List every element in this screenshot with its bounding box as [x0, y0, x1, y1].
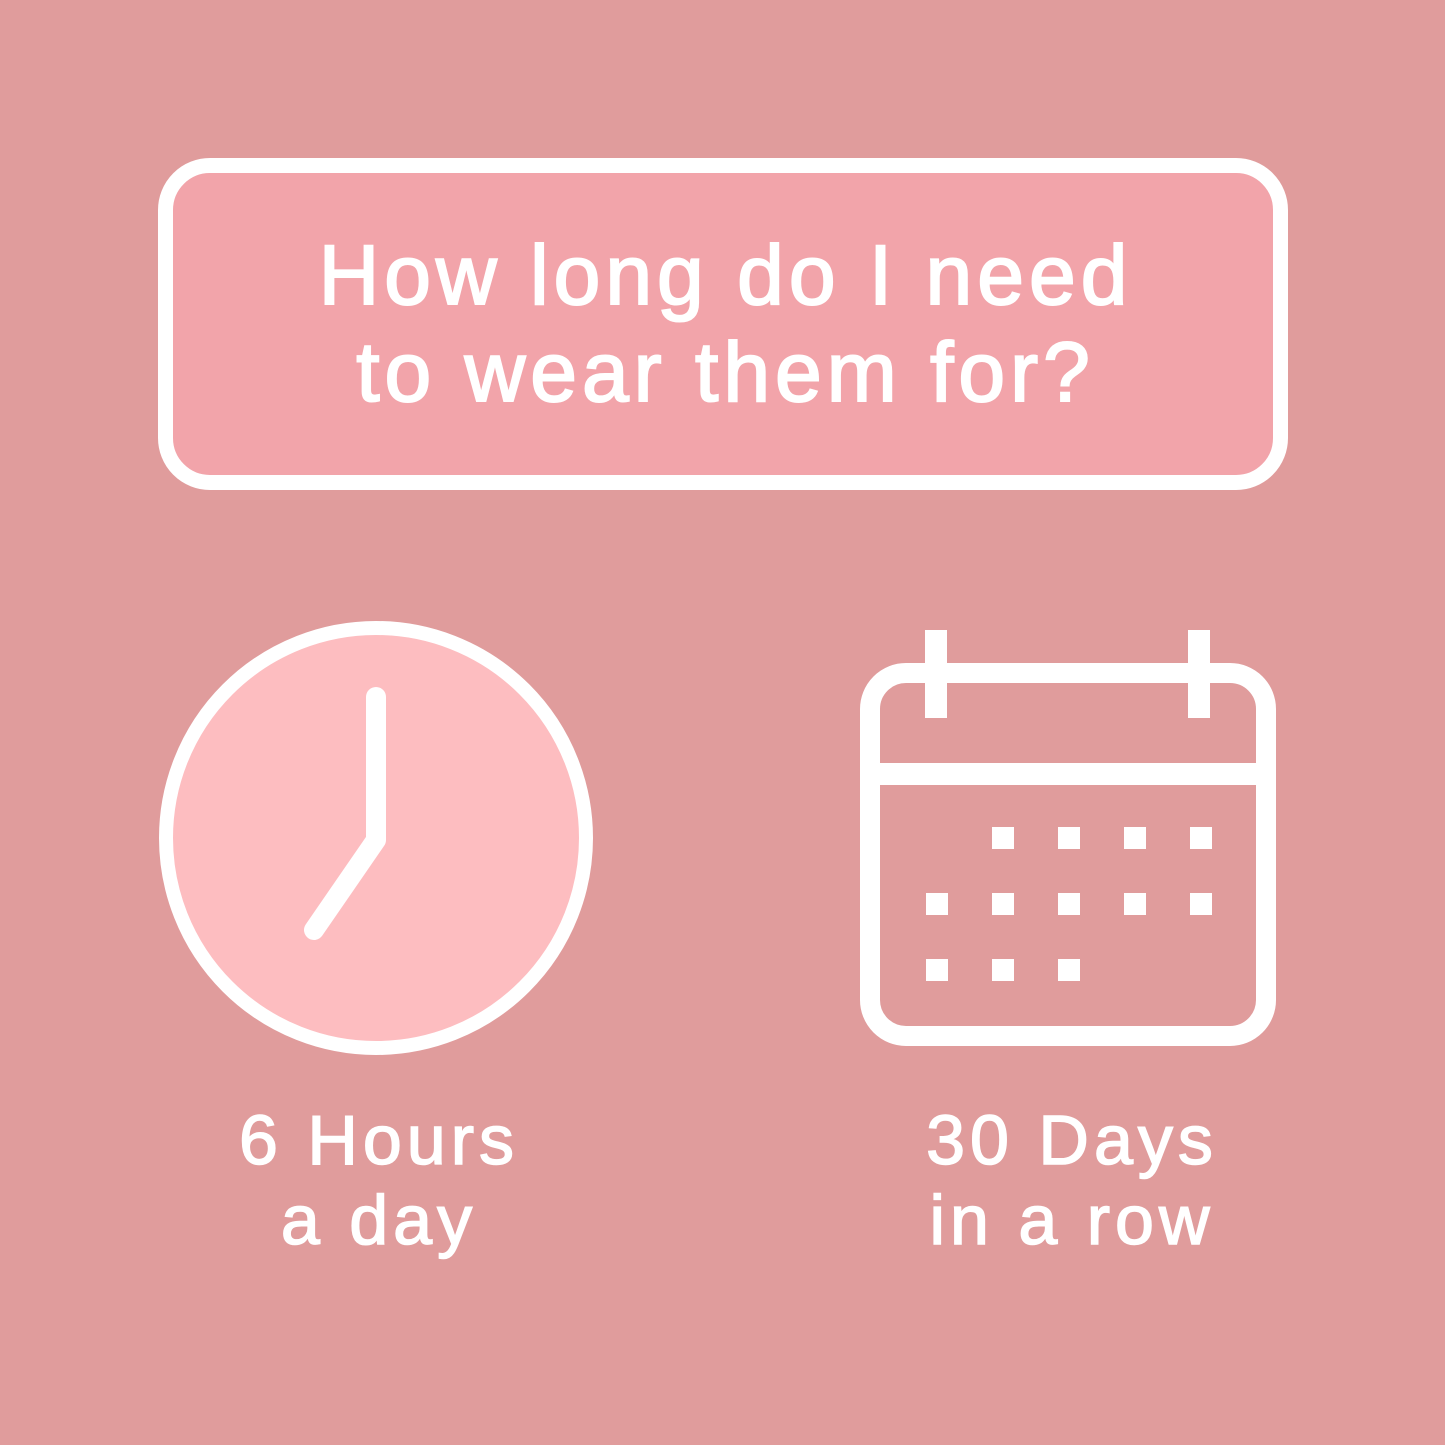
label: 6 hours a day: 6 Hours: [239, 1101, 519, 1179]
label: 6 hours a day: a day: [281, 1181, 477, 1259]
label: 30 days in a row: [926, 1101, 1218, 1259]
label: 6 hours a day: [239, 1101, 519, 1260]
title: [158, 158, 1288, 490]
title: How long do I need: [319, 228, 1132, 322]
title: to wear them for?: [356, 325, 1095, 419]
label: 30 days in a row: 30 Days: [926, 1101, 1218, 1179]
label: 30 days in a row: in a row: [929, 1181, 1215, 1259]
